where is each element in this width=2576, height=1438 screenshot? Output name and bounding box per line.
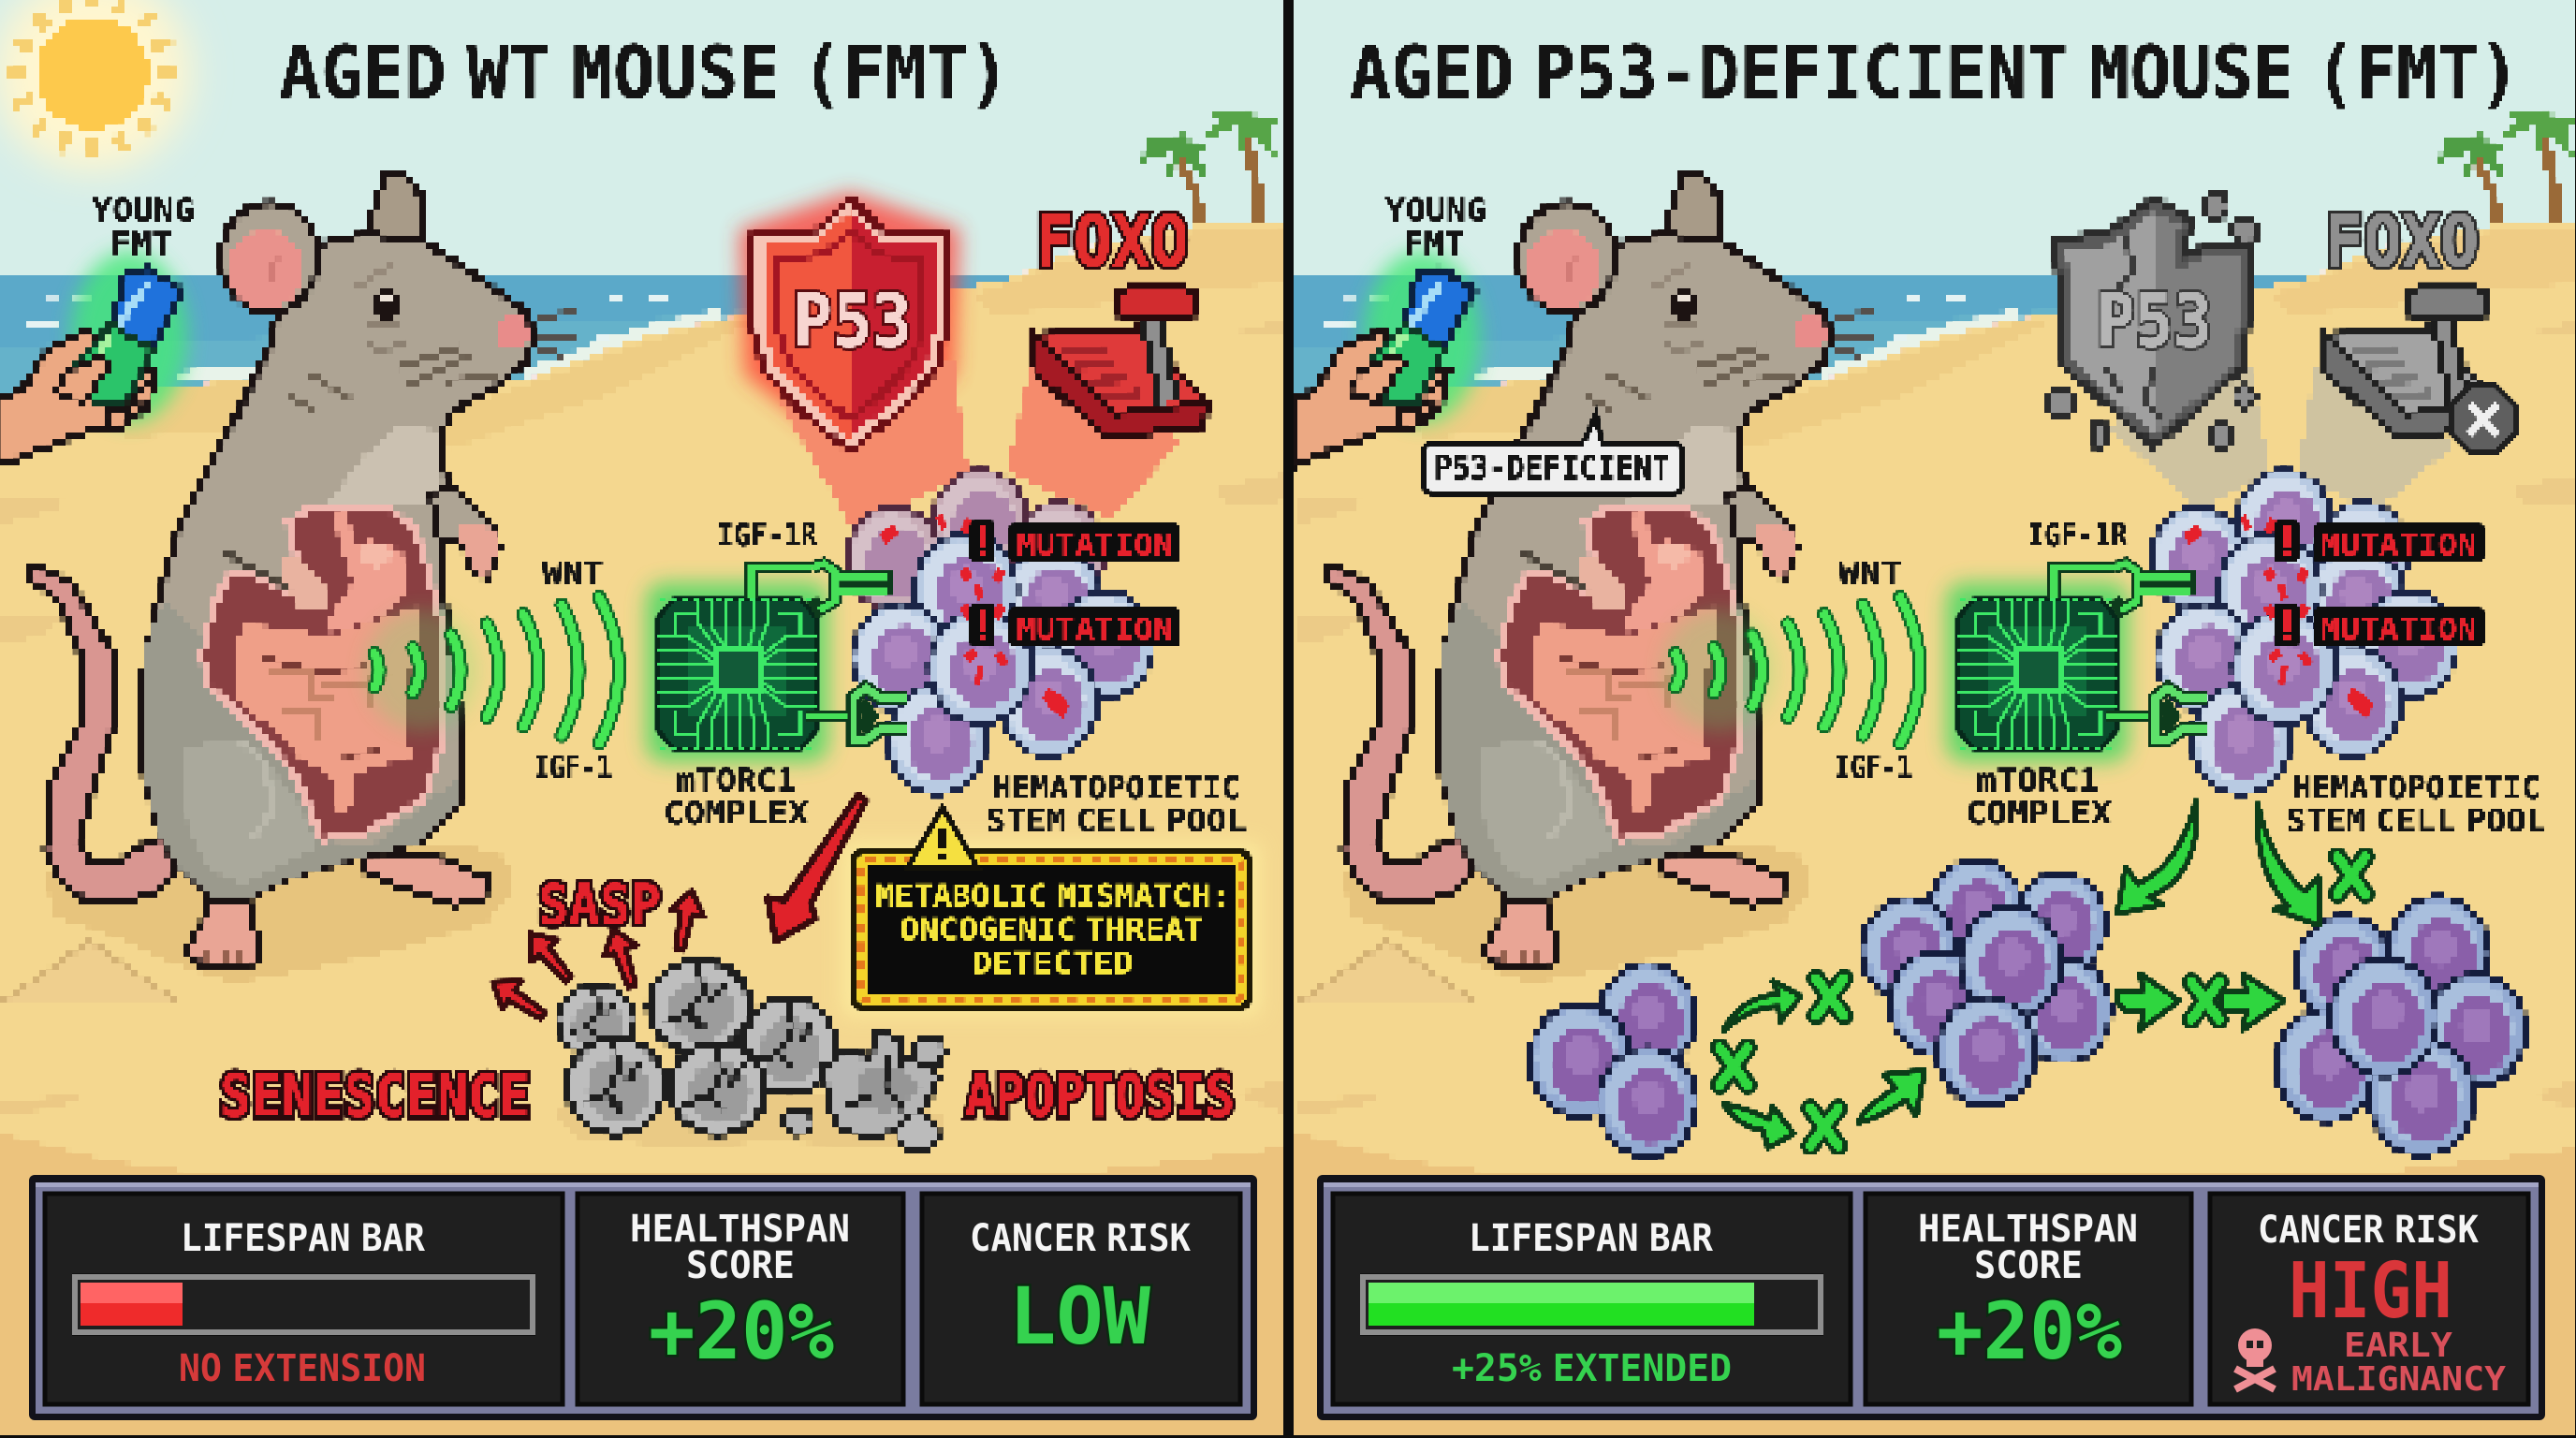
- warning text: DETECTED: [972, 945, 1134, 981]
- receptors: [752, 564, 906, 740]
- label: FOXO faded: FOXO: [2325, 199, 2479, 283]
- main pixel artwork: [1293, 173, 2528, 1159]
- stats panel: WT: [29, 1175, 1257, 1420]
- stat: healthspan score: SCORE: [1974, 1244, 2083, 1287]
- panel: aged P53-deficient mouse: [1279, 0, 2576, 1438]
- stat: lifespan bar: [45, 1194, 563, 1404]
- stat: healthspan score: +20%: [1937, 1285, 2122, 1377]
- stat: lifespan bar: [1333, 1194, 1851, 1404]
- stat: healthspan score: SCORE: [686, 1244, 795, 1287]
- mouse: [1325, 173, 1874, 983]
- fine-detail artwork: [374, 514, 1249, 1030]
- warning box: [854, 808, 1249, 1007]
- label: IGF-1R: IGF-1R: [717, 517, 817, 554]
- glows: capsule, chip: [1364, 251, 2129, 762]
- fine-detail artwork: [1424, 386, 2516, 1148]
- icon: mTORC1 chip: [658, 599, 816, 749]
- label: young FMT: [92, 192, 195, 263]
- label: hematopoietic stem cell pool: [986, 770, 1247, 840]
- stat: cancer risk: LOW: [1009, 1270, 1150, 1362]
- icon: FOXO lever: [1035, 288, 1208, 438]
- stem cell pool: [844, 468, 1156, 797]
- red arrow to senescent cells: [768, 795, 866, 941]
- stem cell pool: [2148, 468, 2460, 797]
- inhibited markers: [1720, 857, 2365, 1146]
- label: SASP: SASP: [538, 873, 661, 938]
- waves: WNT signal: [374, 597, 619, 743]
- icon: hand holding capsule: [0, 269, 182, 465]
- label: WNT: WNT: [1838, 555, 1902, 593]
- senescent grey cells: [552, 957, 945, 1152]
- stat: lifespan bar: LIFESPAN BAR: [181, 1217, 426, 1260]
- label: young FMT: FMT: [110, 226, 172, 263]
- warning text: METABOLIC MISMATCH:: [875, 877, 1230, 914]
- stat: cancer risk: CANCER RISK: [970, 1217, 1191, 1260]
- label: young FMT: YOUNG: [1385, 192, 1486, 229]
- stat: healthspan score: [1866, 1194, 2191, 1404]
- background: beach: [1279, 0, 2576, 1438]
- label: hematopoietic stem cell pool: HEMATOPOIETIC: [2292, 770, 2540, 807]
- label: P53 faded: P53: [2097, 280, 2212, 364]
- panel: aged WT mouse: [0, 0, 1310, 1438]
- mutation labels: MUTATION: [1017, 611, 1173, 647]
- icon: P53 shield: [751, 198, 949, 451]
- mouse: [28, 173, 577, 983]
- background: beach: [0, 0, 1310, 1438]
- label: young FMT: FMT: [1403, 226, 1465, 263]
- SASP arrows: [484, 888, 709, 1030]
- label: hematopoietic stem cell pool: STEM CELL POOL: [986, 802, 1247, 840]
- mutation flags: [880, 514, 1180, 718]
- label: young FMT: YOUNG: [92, 192, 195, 229]
- proliferating cells: large cluster: [2274, 894, 2528, 1158]
- stat: healthspan score: +20%: [649, 1285, 834, 1377]
- stat: cancer risk: [922, 1194, 1240, 1404]
- mutation labels: MUTATION: [2320, 611, 2477, 647]
- label: mTORC1 complex: mTORC1: [676, 762, 797, 800]
- main pixel artwork: [0, 0, 1208, 1152]
- stat: healthspan score: [578, 1194, 903, 1404]
- proliferating cells: small cluster: [1527, 961, 1699, 1159]
- label: IGF-1: IGF-1: [534, 749, 612, 786]
- waves: WNT signal: [1676, 597, 1920, 743]
- label: hematopoietic stem cell pool: HEMATOPOIETIC: [992, 770, 1240, 807]
- label: hematopoietic stem cell pool: [2286, 770, 2546, 840]
- tag: P53-deficient: [1424, 415, 1682, 493]
- stat: cancer risk: [2210, 1194, 2528, 1404]
- label: IGF-1R: IGF-1R: [2027, 517, 2128, 554]
- icon: hand holding capsule: [1293, 269, 1474, 465]
- text labels: [92, 32, 1247, 1130]
- icon: sun: [7, 0, 179, 159]
- mutation labels: MUTATION: [2320, 527, 2477, 563]
- proliferating cells: medium cluster: [1859, 858, 2114, 1108]
- label: FOXO: FOXO: [1035, 199, 1189, 283]
- beams from shield and lever: [781, 358, 1183, 532]
- label: IGF-1: IGF-1: [1835, 749, 1912, 786]
- green haze over belly: [365, 609, 477, 731]
- label: WNT: WNT: [542, 555, 604, 593]
- stat: healthspan score: HEALTHSPAN: [1918, 1208, 2138, 1251]
- label: hematopoietic stem cell pool: STEM CELL POOL: [2286, 802, 2546, 840]
- icon: disabled FOXO lever: [2326, 288, 2498, 438]
- icon: skull and crossbones: [2235, 1328, 2275, 1389]
- mutation labels: MUTATION: [1017, 527, 1173, 563]
- label: mTORC1 complex: COMPLEX: [1966, 795, 2113, 832]
- stat: cancer risk: HIGH: [2289, 1247, 2452, 1336]
- glows: sun, capsule, shield, warning box: [0, 0, 1260, 1016]
- mutation labels: [1017, 527, 1173, 647]
- stat: lifespan bar: +25% EXTENDED: [1452, 1347, 1732, 1390]
- stat: cancer risk: MALIGNANCY: [2291, 1360, 2506, 1399]
- label: young FMT: [1385, 192, 1486, 263]
- label: P53: P53: [793, 280, 912, 364]
- mutation labels: [2320, 527, 2477, 647]
- text labels: [1350, 32, 2546, 840]
- grey beams: [2109, 362, 2454, 514]
- stats panel: P53-deficient: [1317, 1175, 2545, 1420]
- stat: lifespan bar: NO EXTENSION: [179, 1347, 426, 1390]
- stat: cancer risk: EARLY: [2344, 1327, 2452, 1365]
- title: AGED P53-DEFICIENT MOUSE (FMT): [1350, 32, 2520, 116]
- label: mTORC1 complex: COMPLEX: [664, 795, 810, 832]
- icon: broken P53 shield: [2046, 193, 2257, 449]
- receptors: [2054, 564, 2208, 740]
- green haze over belly: [1662, 609, 1775, 731]
- label: senescence: SENESCENCE: [220, 1062, 530, 1130]
- label: apoptosis: APOPTOSIS: [965, 1062, 1235, 1130]
- label: mTORC1 complex: mTORC1: [1976, 762, 2100, 800]
- stat: lifespan bar: LIFESPAN BAR: [1469, 1217, 1714, 1260]
- stat: healthspan score: HEALTHSPAN: [630, 1208, 850, 1251]
- mutation flags: [2184, 514, 2484, 718]
- label: P53-deficient: P53-DEFICIENT: [1434, 449, 1670, 488]
- warning text: [875, 877, 1230, 981]
- icon: X badge: [2451, 386, 2516, 453]
- stat: cancer risk: CANCER RISK: [2258, 1209, 2479, 1252]
- warning text: ONCOGENIC THREAT: [900, 911, 1204, 947]
- label: mTORC1 complex: [664, 762, 810, 832]
- green proliferation arrows: [1723, 801, 2319, 1148]
- icon: mTORC1 chip: [1958, 599, 2116, 749]
- label: mTORC1 complex: [1966, 762, 2113, 832]
- title: AGED WT MOUSE (FMT): [279, 32, 1010, 116]
